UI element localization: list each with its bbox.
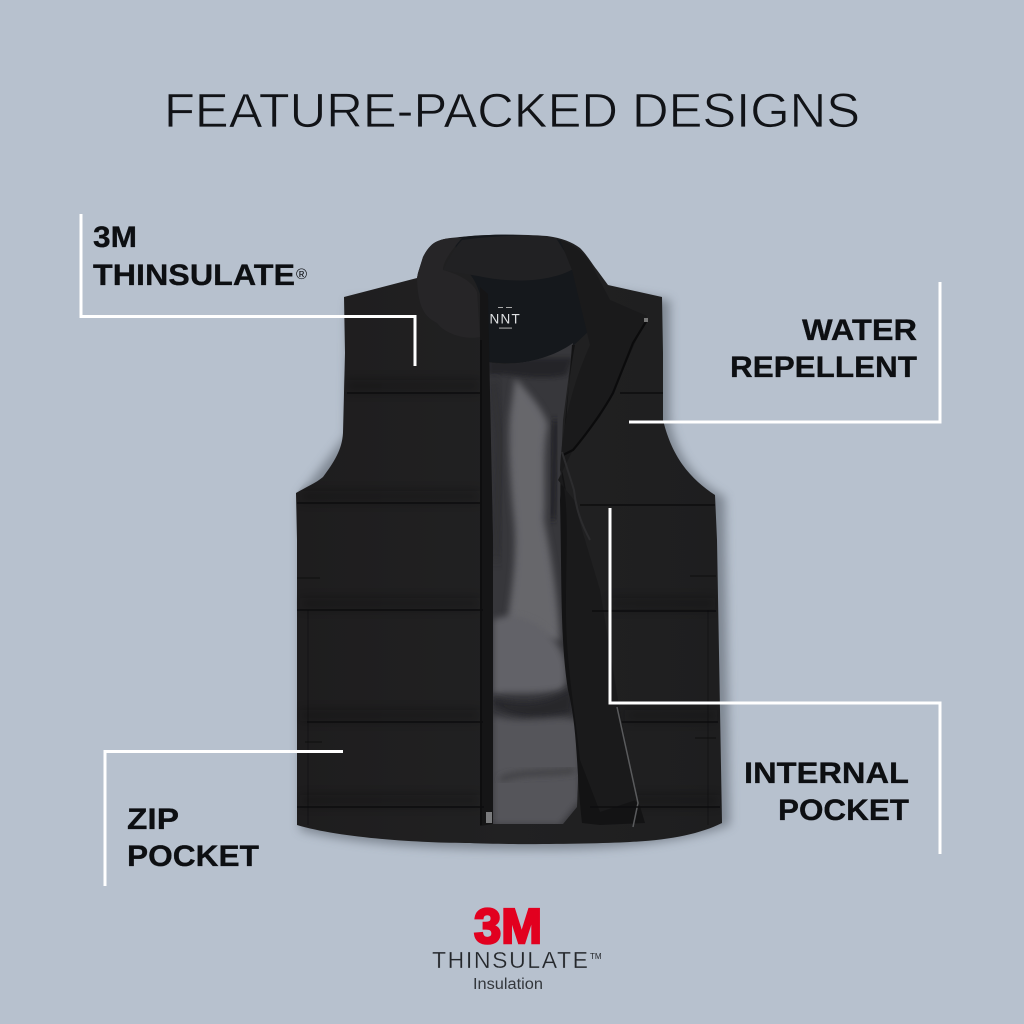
quilting seams: [297, 393, 720, 825]
label: zip pocket: POCKET: [127, 840, 259, 873]
label: 3M Thinsulate: [93, 221, 307, 292]
satin lining: [490, 343, 578, 824]
vest photograph illustration: [296, 235, 730, 849]
label: water repellent: WATER: [802, 314, 917, 347]
label: water repellent: REPELLENT: [730, 351, 917, 384]
label: internal pocket: [744, 757, 909, 827]
3M Thinsulate logo: [432, 900, 602, 993]
left zip placket: [480, 287, 493, 826]
title: FEATURE-PACKED DESIGNS: [164, 84, 860, 138]
neck label: NNT: [490, 312, 520, 326]
callout lines: zip pocket: [105, 752, 343, 886]
vest body: [296, 235, 722, 844]
3M Thinsulate logo: TM: [590, 952, 602, 961]
label: zip pocket: [127, 803, 259, 873]
right front panel and zipper: [486, 240, 648, 827]
neck label: [490, 307, 520, 329]
label: 3M Thinsulate: THINSULATE: [93, 259, 295, 292]
inner collar band: [443, 236, 575, 281]
label: internal pocket: INTERNAL: [744, 757, 909, 790]
label: water repellent: [730, 314, 917, 384]
puffer panel shading: [296, 380, 344, 608]
callout lines: water repellent: [629, 282, 940, 422]
Insulation caption: Insulation: [473, 976, 543, 993]
callout lines: internal pocket: [610, 508, 940, 854]
label: zip pocket: ZIP: [127, 803, 179, 836]
label: 3M Thinsulate: ®: [296, 266, 307, 283]
callout lines: 3M Thinsulate: [81, 214, 415, 366]
3M wordmark: 3M: [474, 900, 542, 954]
label: internal pocket: POCKET: [778, 794, 909, 827]
neck interior: [455, 235, 590, 363]
Thinsulate wordmark: THINSULATE: [432, 947, 588, 973]
label: 3M Thinsulate: 3M: [93, 221, 137, 254]
vest shadow: [300, 290, 730, 849]
front collar: [417, 238, 480, 338]
